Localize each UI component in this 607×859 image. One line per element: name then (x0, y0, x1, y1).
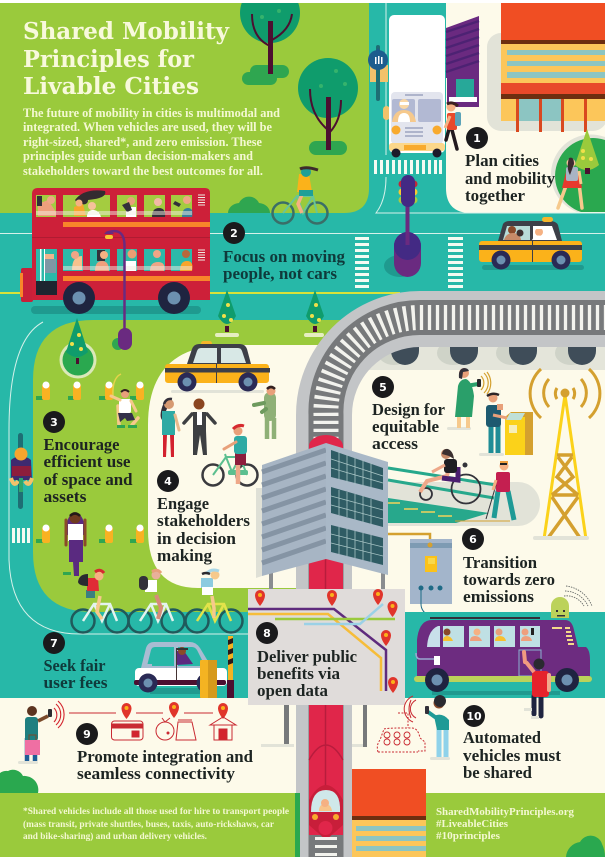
number 9 (76, 723, 98, 745)
public data panel (248, 589, 405, 705)
traffic light (384, 175, 421, 277)
footer note panel: *Shared vehicles include all those used for hire to transport people (23, 806, 289, 816)
number 3: 3 (50, 416, 58, 429)
person boarding van (524, 652, 549, 719)
wheelchair user (420, 449, 480, 504)
person with baby carrier (479, 394, 507, 456)
heading 2 (223, 250, 345, 282)
heading 9 (77, 747, 254, 783)
number 7: 7 (50, 637, 58, 650)
toll barrier (200, 636, 234, 698)
number 6: 6 (469, 533, 477, 546)
purple bus stop (446, 16, 479, 107)
number 3 (43, 411, 65, 433)
heading 10: vehicles must (463, 746, 561, 765)
bus passengers (36, 190, 192, 295)
footer links panel: SharedMobilityPrinciples.org (436, 807, 575, 818)
white bus: front view (383, 15, 445, 158)
person with cane (486, 461, 514, 520)
footer note panel: (mass transit, private shuttles, buses, taxis, auto-rickshaws, car (23, 819, 274, 829)
heading 10 (463, 728, 561, 782)
heading 2: Focus on moving (223, 247, 346, 266)
battery charging box (388, 534, 452, 616)
train passing under the building (309, 435, 343, 856)
heading 2: people, not cars (223, 264, 337, 283)
heading 3: Encourage (44, 435, 120, 454)
support posts (261, 705, 367, 747)
heading 1: together (465, 186, 526, 205)
heading 8 (257, 647, 358, 700)
title: Principles for (23, 46, 195, 73)
heading 4: making (157, 546, 213, 565)
number 4: 4 (164, 475, 172, 488)
bush by the cyclist (228, 197, 270, 213)
title: Shared Mobility (23, 18, 230, 45)
number 2 (223, 222, 245, 244)
pedestrian with backpack by bus (445, 102, 461, 149)
number 5 (372, 376, 394, 398)
transmission tower with signal arcs (530, 369, 600, 540)
heading 5 (372, 400, 446, 453)
transit map (248, 604, 395, 691)
heading 6: towards zero (463, 570, 555, 589)
icon: house (210, 717, 236, 740)
heading 5: access (372, 434, 418, 453)
number 10: 10 (466, 710, 482, 723)
automated car outline and person with phone (377, 695, 450, 760)
cyclist: top road (272, 167, 328, 224)
yellow taxi: road (479, 217, 584, 270)
heading 5: equitable (372, 417, 440, 436)
footer links panel: #LiveableCities (436, 819, 508, 830)
number 4 (157, 470, 179, 492)
heading 7: Seek fair (44, 656, 106, 675)
station shade under the viaduct (345, 341, 605, 370)
number 9: 9 (83, 728, 91, 741)
intro text: integrated. When vehicles are used, they will be (23, 119, 272, 134)
heading 3: of space and (44, 470, 133, 489)
section 5 people and kiosk (447, 368, 533, 456)
intro text: principles guide urban decision-makers and (23, 148, 254, 163)
heading 1 (465, 151, 556, 205)
building: top right (487, 3, 607, 132)
intro text: stakeholders toward the best outcomes for all. (23, 163, 263, 178)
number 10 (463, 705, 485, 727)
office building (256, 443, 388, 592)
heading 1: and mobility (465, 169, 556, 188)
heading 8: open data (257, 681, 329, 700)
roundabout tree (60, 318, 96, 378)
number 8 (256, 622, 278, 644)
heading 9: seamless connectivity (77, 764, 236, 783)
title (24, 21, 230, 94)
number 1: 1 (473, 132, 481, 145)
heading 9: Promote integration and (77, 747, 254, 766)
intro text (23, 105, 281, 178)
number 1 (466, 127, 488, 149)
heading 3: efficient use (44, 452, 131, 471)
icon: fruit and shopping bag (156, 718, 196, 740)
three cyclists (72, 570, 242, 632)
footer links panel (426, 793, 605, 857)
pregnant woman with phone (447, 368, 491, 430)
intro text: right-sized, shared*, and zero emission. These (23, 134, 262, 149)
footer links panel: #10principles (436, 831, 500, 842)
number 8: 8 (263, 627, 271, 640)
connectivity line and pins (69, 702, 228, 719)
heading 10: be shared (463, 763, 533, 782)
heading 6: emissions (463, 587, 534, 606)
building: bottom centre (352, 769, 426, 857)
heading 5: Design for (372, 400, 446, 419)
intro text: The future of mobility in cities is multimodal and (23, 105, 281, 120)
panel: teal behind electric van (405, 612, 605, 698)
accessible ramp (388, 468, 540, 526)
child with kite (111, 374, 138, 428)
heading 7 (44, 659, 108, 688)
roadside trees (215, 290, 324, 337)
number 5: 5 (379, 381, 387, 394)
tree and walker: section 1 (551, 129, 605, 212)
heading 6: Transition (463, 553, 538, 572)
automated robot head signal (564, 586, 592, 606)
icon: payment card (112, 721, 143, 740)
person walking with backpack (63, 512, 85, 576)
heading 4 (157, 494, 250, 565)
heading 4: Engage (157, 494, 210, 513)
number 7 (43, 632, 65, 654)
cyclist with helmet (202, 425, 258, 486)
heading 6 (463, 553, 555, 606)
bollards (36, 382, 144, 543)
double-decker bus (20, 188, 210, 314)
cyclist: top view on left path (11, 433, 32, 509)
heading 8: Deliver public (257, 647, 358, 666)
tree: top centre (240, 0, 300, 85)
heading 10: Automated (463, 728, 542, 747)
tree: right of title (298, 58, 358, 155)
heading 7: user fees (44, 673, 108, 692)
kiosk (505, 412, 533, 455)
heading 1: Plan cities (465, 151, 539, 170)
footer note panel: and bike-sharing) and urban delivery vehicles. (23, 831, 207, 841)
cyclist: top view on vertical road (368, 45, 388, 101)
electric purple van (414, 597, 592, 695)
curved elevated viaduct (324, 317, 607, 859)
heading 4: stakeholders (157, 511, 250, 530)
woman with phone and shopping bag (18, 701, 64, 764)
footer note panel (0, 793, 300, 857)
bush: bottom left (0, 770, 38, 793)
title: Livable Cities (23, 73, 199, 100)
number 2: 2 (230, 227, 238, 240)
heading 3 (44, 439, 132, 502)
stakeholders group (161, 386, 276, 457)
heading 3: assets (44, 487, 87, 506)
heading 4: in decision (157, 529, 237, 548)
street lamp (104, 231, 132, 350)
heading 8: benefits via (257, 664, 341, 683)
number 6 (462, 528, 484, 550)
taxi: centre (165, 341, 270, 393)
white car at toll (134, 642, 227, 694)
